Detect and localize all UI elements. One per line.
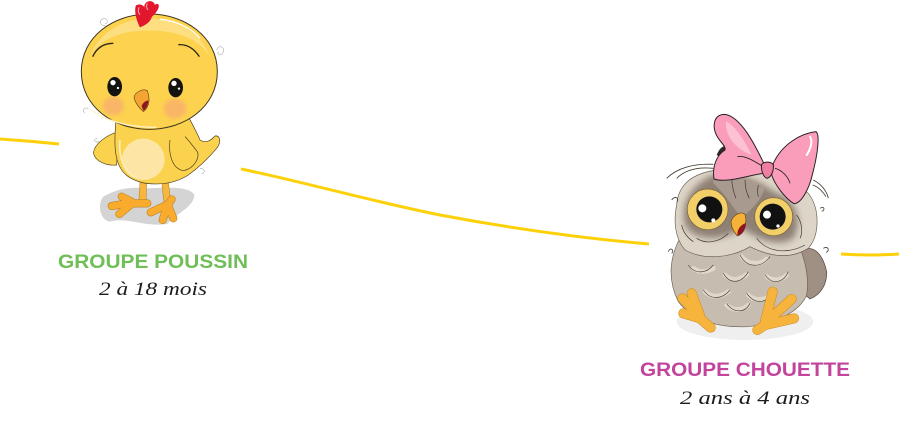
chick body and tail [115,113,220,184]
chick body shine [120,140,135,177]
connector line: left [0,139,59,144]
chick shadow [100,188,194,225]
heading: groupe poussin: GROUPE POUSSIN [58,251,248,273]
owl bow [714,114,818,204]
chick cheeks [103,97,124,115]
bow knot [761,162,773,178]
bow left lobe [714,114,763,180]
chick right foot [151,199,173,220]
chick curls [83,19,224,173]
age text: chouette: 2 ans à 4 ans [680,388,810,409]
owl chest feathers [693,257,787,309]
chick head highlight [90,18,210,57]
owl right wing [790,248,827,299]
owl shadow [677,303,813,340]
chick head [81,14,217,129]
owl left foot [682,293,711,328]
chick comb [135,1,159,27]
chick left foot [112,197,147,214]
icon: owl [667,114,828,340]
bow dark hair [717,146,732,162]
icon: chick [81,1,224,225]
bow highlights [726,122,752,155]
connector line: middle [241,169,649,244]
age text: poussin: 2 à 18 mois [99,279,207,300]
chick left wing [93,132,118,165]
chick legs [139,182,171,203]
owl left eye [687,189,728,230]
owl beak [731,213,746,236]
owl forehead [713,175,765,217]
owl face feather strokes [682,177,805,251]
owl right eye [755,198,793,236]
owl feather strokes [688,255,788,311]
chick eyes [107,77,122,96]
owl head tufts [667,164,828,253]
connector line: right [841,254,899,255]
chick chin highlight [92,110,157,127]
chick belly [122,139,165,180]
bow right lobe [772,132,818,204]
owl head [675,169,817,257]
heading: groupe chouette: GROUPE CHOUETTE [640,359,850,381]
owl body [671,235,808,327]
owl right foot [757,292,794,330]
chick brows [93,43,199,57]
chick right wing [170,137,198,171]
owl face shading [684,174,798,242]
chick beak [134,90,149,112]
